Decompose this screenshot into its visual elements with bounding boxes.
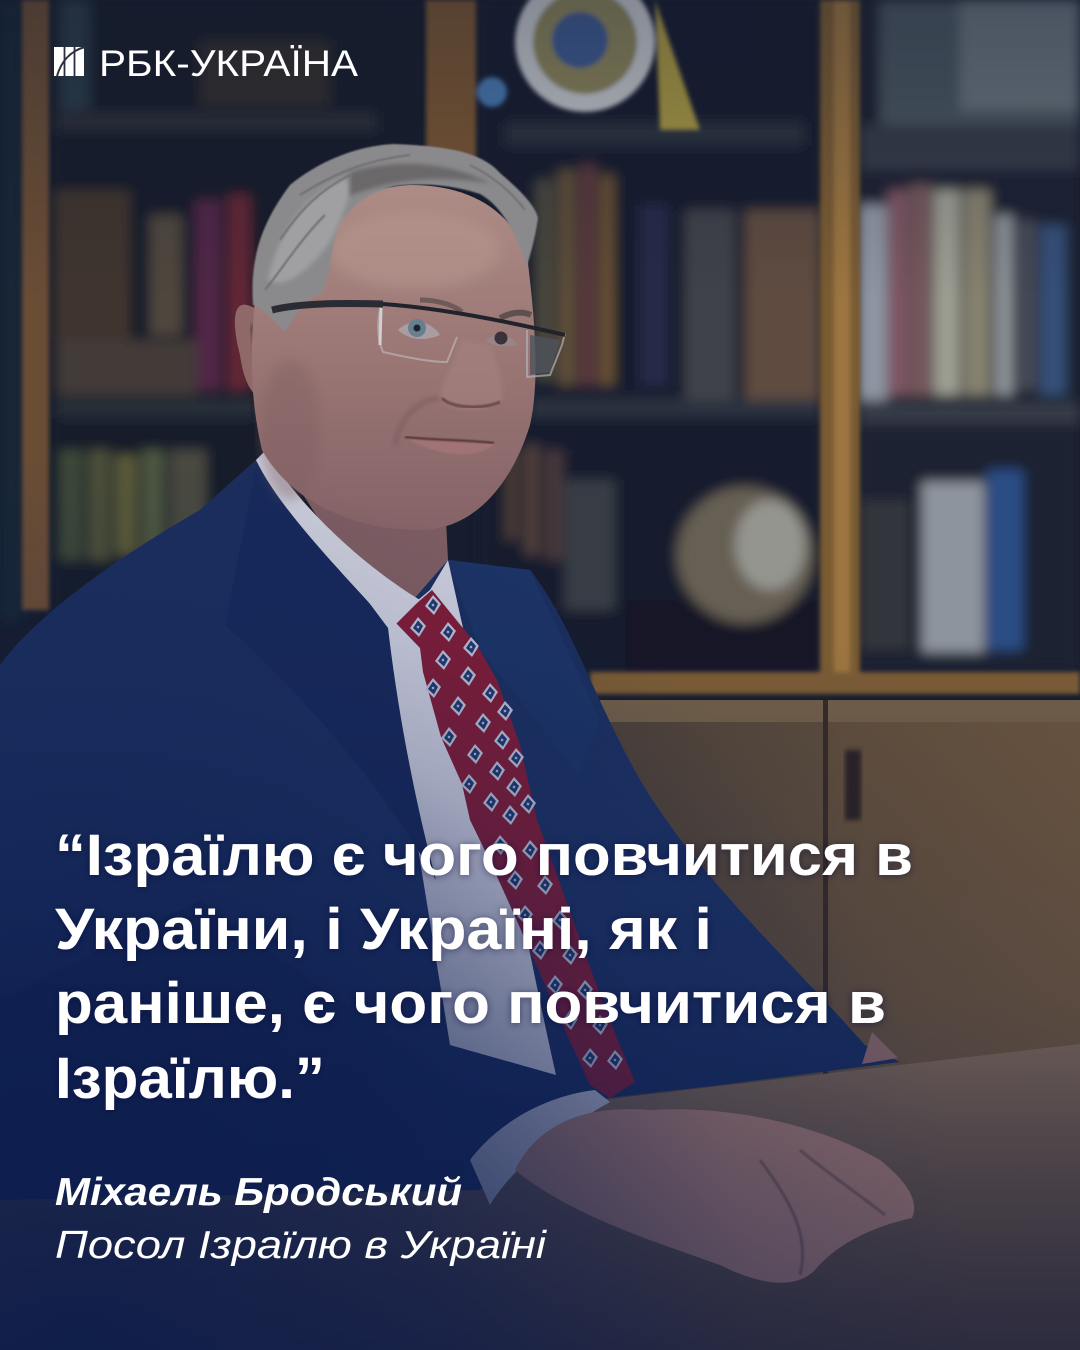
quote text: Ізраїлю.”: [55, 1046, 325, 1111]
mouth: [405, 437, 494, 454]
attribution: Міхаель Бродський: [55, 1171, 462, 1214]
quote text: раніше, є чого повчитися в: [55, 971, 886, 1036]
attribution: Посол Ізраїлю в Україні: [55, 1224, 548, 1267]
table: [0, 1044, 1080, 1350]
jacket: [0, 458, 900, 1190]
cheek shading: [260, 212, 500, 500]
quote text: України, і Україні, як і: [55, 897, 712, 962]
attribution: [55, 1171, 548, 1267]
quote text: [55, 823, 913, 1111]
tie: [395, 590, 635, 1098]
quote text: “Ізраїлю є чого повчитися в: [55, 823, 913, 888]
sleeve and cuff: [0, 900, 600, 1200]
right lapel: [448, 560, 600, 775]
neck: [262, 430, 448, 615]
logo icon: [54, 47, 85, 76]
hair: [252, 144, 538, 332]
ear: [235, 305, 285, 399]
lapel: [225, 458, 436, 880]
shirt: [256, 460, 556, 1075]
hand: [515, 1032, 914, 1283]
eyes and brows: [398, 300, 531, 346]
head: [252, 185, 536, 530]
logo: РБК-Україна: [54, 43, 358, 84]
logo wordmark: РБК-УКРАЇНА: [99, 43, 358, 84]
nose: [440, 340, 503, 410]
glasses: [272, 304, 565, 377]
